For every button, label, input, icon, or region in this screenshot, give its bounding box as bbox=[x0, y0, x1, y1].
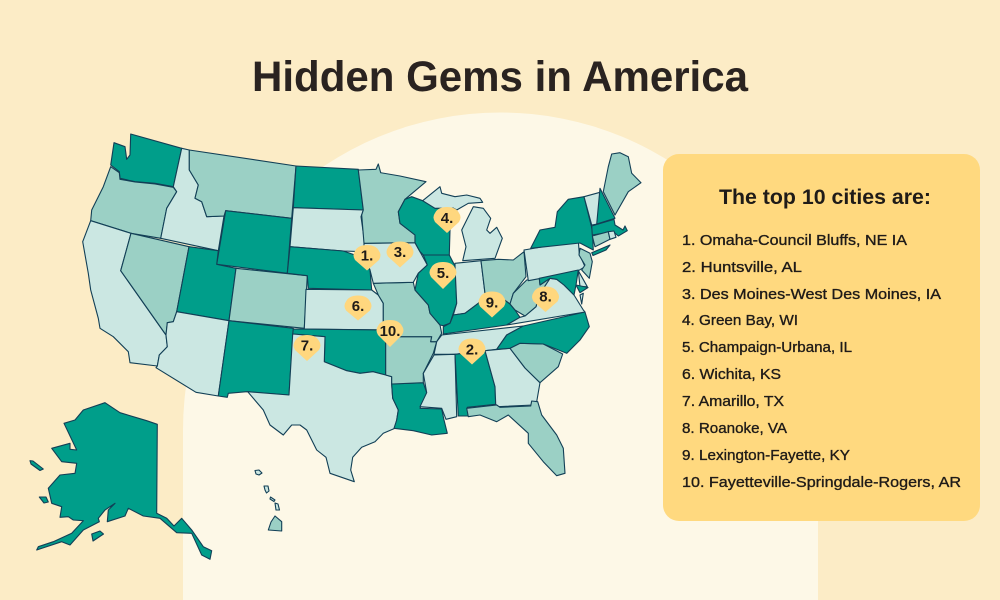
pin 9 bbox=[478, 292, 506, 318]
island: Kodiak bbox=[92, 531, 104, 541]
state: Iowa bbox=[364, 243, 427, 283]
city list: 9. Lexington-Fayette, KY bbox=[682, 447, 850, 464]
pin 5: 5. bbox=[437, 265, 449, 282]
pin 3 bbox=[386, 242, 414, 268]
state: Nevada bbox=[121, 233, 189, 335]
state: Florida bbox=[467, 401, 565, 476]
panel: top 10 cities bbox=[663, 154, 980, 521]
state: West Virginia bbox=[510, 278, 550, 316]
city list: 6. Wichita, KS bbox=[682, 366, 781, 383]
state: Utah bbox=[177, 247, 236, 321]
state: Delaware bbox=[578, 271, 587, 287]
state: New Mexico bbox=[218, 321, 293, 397]
state: Alaska bbox=[37, 403, 212, 559]
state: Massachusetts bbox=[592, 219, 627, 236]
state: Arkansas bbox=[386, 337, 437, 384]
panel background bbox=[663, 154, 980, 521]
island: Hawaii Maui bbox=[275, 503, 280, 510]
state: Maryland bbox=[539, 270, 578, 295]
state: Vermont bbox=[584, 192, 600, 225]
state: Long Island bbox=[592, 245, 610, 256]
pin 2 bbox=[458, 338, 486, 364]
city list: 10. Fayetteville-Springdale-Rogers, AR bbox=[682, 474, 961, 491]
city list: 8. Roanoke, VA bbox=[682, 420, 787, 437]
state: Pennsylvania bbox=[524, 241, 585, 281]
pin 4 bbox=[434, 207, 460, 233]
pin 9: 9. bbox=[486, 294, 498, 312]
city list: 1. Omaha-Council Bluffs, NE IA bbox=[682, 232, 907, 249]
island: Hawaii Kauai bbox=[255, 470, 262, 475]
state: Kentucky bbox=[443, 293, 520, 334]
state: North Carolina bbox=[497, 312, 589, 353]
city list: 5. Champaign-Urbana, IL bbox=[682, 339, 852, 356]
city list: 3. Des Moines-West Des Moines, IA bbox=[682, 286, 941, 303]
pin 1 bbox=[354, 245, 380, 270]
pin 4: 4. bbox=[441, 210, 453, 227]
panel heading: The top 10 cities are: bbox=[719, 186, 931, 209]
city list: 7. Amarillo, TX bbox=[682, 393, 784, 410]
island: Alaska west bbox=[39, 497, 48, 503]
island: Hawaii big island bbox=[268, 516, 282, 531]
state: Oklahoma bbox=[293, 329, 386, 375]
pin 6: 6. bbox=[352, 298, 364, 315]
state: New Hampshire bbox=[597, 188, 615, 224]
pin 1: 1. bbox=[361, 248, 373, 264]
state: Minnesota bbox=[358, 164, 426, 243]
background arch bbox=[183, 112, 818, 600]
island: Alaska north bbox=[30, 461, 43, 470]
state: Maryland eastern shore bbox=[576, 285, 588, 293]
island: Hawaii Molokai bbox=[270, 497, 275, 502]
title: Hidden Gems in America bbox=[252, 53, 749, 101]
pin 3: 3. bbox=[394, 244, 406, 261]
state: California bbox=[83, 221, 167, 366]
state: South Carolina bbox=[510, 343, 563, 383]
state: Montana bbox=[189, 150, 296, 218]
pin 8: 8. bbox=[539, 288, 552, 306]
state: South Dakota bbox=[290, 208, 365, 252]
state: Missouri bbox=[373, 282, 442, 342]
state: Oregon bbox=[91, 167, 177, 238]
state: Wisconsin bbox=[398, 197, 456, 255]
state: Arizona bbox=[156, 312, 229, 396]
city list bbox=[682, 232, 961, 491]
state: Connecticut bbox=[592, 232, 610, 247]
state: Alabama bbox=[455, 351, 496, 416]
pin 6 bbox=[344, 296, 372, 320]
state: Indiana bbox=[453, 261, 485, 315]
state: Nebraska bbox=[287, 247, 372, 290]
pin 2: 2. bbox=[466, 342, 478, 358]
state: Virginia eastern shore bbox=[580, 293, 583, 304]
state: Rhode Island bbox=[608, 231, 616, 239]
island: Hawaii Oahu bbox=[264, 486, 269, 493]
state: Idaho bbox=[161, 148, 224, 251]
state: Wyoming bbox=[217, 211, 292, 273]
state: New York bbox=[531, 197, 593, 250]
state: Colorado bbox=[229, 268, 307, 328]
state: Texas bbox=[248, 334, 398, 482]
city list: 4. Green Bay, WI bbox=[682, 312, 798, 329]
state: Virginia bbox=[507, 278, 585, 325]
pin 5 bbox=[430, 262, 456, 289]
pin 8 bbox=[532, 286, 559, 312]
state: North Dakota bbox=[293, 166, 363, 210]
state: Maine bbox=[603, 153, 641, 215]
pin 7 bbox=[294, 335, 320, 361]
state: New Jersey bbox=[579, 248, 592, 278]
state: Louisiana bbox=[392, 383, 447, 435]
pin 7: 7. bbox=[301, 338, 313, 354]
city list: 2. Huntsville, AL bbox=[682, 259, 802, 276]
pin 10 bbox=[376, 320, 404, 347]
state: Mississippi bbox=[420, 354, 457, 419]
state: Kansas bbox=[304, 289, 383, 330]
pin 10: 10. bbox=[380, 323, 400, 340]
state: Ohio bbox=[481, 252, 526, 304]
state: Illinois bbox=[415, 255, 457, 326]
state: Washington bbox=[111, 134, 182, 187]
state: Tennessee bbox=[434, 326, 523, 354]
state: Michigan upper peninsula bbox=[423, 187, 483, 210]
state: Michigan lower peninsula bbox=[462, 207, 502, 261]
map of the United States bbox=[30, 134, 641, 559]
state: Georgia bbox=[485, 348, 540, 407]
